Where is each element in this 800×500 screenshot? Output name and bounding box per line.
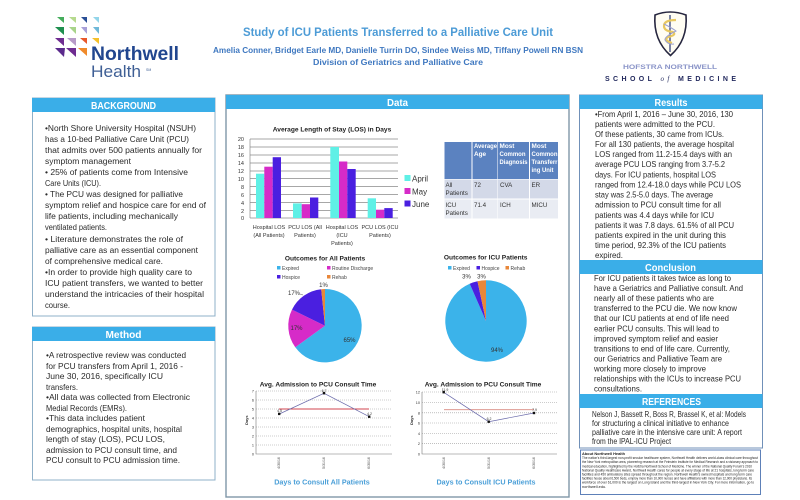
- panel: background: [32, 98, 215, 316]
- text: background: • 25% of patients come from Intensive: [45, 167, 188, 177]
- line chart: all patients consult time: 1: [252, 444, 254, 448]
- text: conclusion: nearly all of these patients who are: [594, 293, 714, 303]
- text: background: symptom relief and hospice care for end of: [45, 200, 207, 210]
- text: results: patients expired in the unit during this: [595, 230, 727, 240]
- text: results: •From April 1, 2016 – June 30, 2016, 130: [595, 109, 733, 119]
- table: patient characteristics: ing Unit: [532, 167, 554, 174]
- bar chart: average length of stay: PCU LOS (ICU: [362, 225, 399, 231]
- text: conclusion: consultations.: [594, 384, 642, 394]
- line chart: ICU patients consult time: Days to Consult ICU Patients: [436, 478, 536, 486]
- line chart: all patients consult time: 0: [252, 452, 254, 456]
- bar chart: average length of stay: Hospital LOS: [326, 225, 359, 231]
- text: results: For all 130 patients, the average hospital: [595, 139, 734, 149]
- logo: Hofstra Northwell School of Medicine: [605, 12, 736, 83]
- table: patient characteristics: ER: [532, 182, 541, 189]
- heading: background: BACKGROUND: [91, 100, 156, 112]
- bar chart: average length of stay: PCU LOS (All: [288, 225, 322, 231]
- text box: about Northwell Health: National Quality Healthcare Award, Northwell Health cares for people at every stage of life at 21 hospitals, long term care: [582, 467, 754, 472]
- text box: about Northwell Health: workforce of over 61,000 is the largest on Long Island and the third-largest in New York City. For more information, go to: [582, 480, 754, 485]
- line chart: ICU patients consult time: 6.2: [487, 417, 491, 421]
- text: method: for PCU transfers from April 1, 2016 -: [46, 361, 183, 371]
- text: background: understand the intricacies of their hospital: [45, 289, 204, 299]
- panel: method: [32, 327, 215, 480]
- text: conclusion: earlier PCU consults. This will lead to: [594, 324, 719, 334]
- legend: months: June: [412, 200, 430, 209]
- bar chart: average length of stay: 0: [241, 216, 244, 222]
- line chart: all patients consult time: 5: [252, 408, 254, 412]
- text: references: palliative care in the intensive care unit: A report: [592, 427, 742, 437]
- table: patient characteristics: Age: [474, 151, 487, 158]
- text: method: Medial Records (EMRs).: [46, 403, 127, 413]
- line chart: ICU patients consult time: 0: [418, 452, 420, 456]
- pie chart: outcomes for ICU patients: Outcomes for ICU Patients: [444, 254, 528, 262]
- text: results: expired.: [595, 250, 623, 260]
- line chart: ICU patients consult time: Days: [409, 415, 414, 425]
- line chart: ICU patients consult time: 4: [418, 432, 420, 436]
- heading: method: [32, 327, 215, 341]
- text: background: •North Shore University Hospital (NSUH): [45, 123, 196, 133]
- logo: Northwell Health: Northwell: [91, 44, 179, 65]
- text: conclusion: For ICU patients it takes twice as long to: [594, 273, 731, 283]
- text: method: •A retrospective review was conducted: [46, 350, 186, 360]
- line chart: ICU patients consult time: 8: [418, 411, 420, 415]
- pie chart: outcomes for ICU patients: Rehab: [510, 266, 525, 272]
- text: background: • Literature demonstrates the role of: [45, 234, 184, 244]
- line chart: ICU patients consult time: 7.9: [532, 408, 537, 412]
- pie chart: outcomes for ICU patients: 3%: [477, 274, 487, 280]
- table: patient characteristics: Common: [532, 151, 558, 158]
- text: background: palliative care as an essential component: [45, 245, 199, 255]
- line chart: all patients consult time: 4: [252, 416, 254, 420]
- text: conclusion: improved symptom relief and easier: [594, 334, 718, 344]
- pie chart: outcomes for ICU patients: [444, 254, 528, 362]
- heading: results: [580, 95, 762, 109]
- bar chart: average length of stay: 12: [238, 169, 244, 175]
- table: patient characteristics: Common: [500, 151, 526, 158]
- text: references: for structuring a clinical initiative to enhance: [592, 418, 729, 428]
- table: patient characteristics: 71.4: [474, 202, 487, 209]
- heading: references: REFERENCES: [642, 396, 701, 408]
- text: references: from the IPAL-ICU Project: [592, 436, 671, 446]
- line chart: all patients consult time: 4.5: [277, 409, 282, 413]
- text: method: •This data includes patient: [46, 413, 146, 423]
- bar chart: average length of stay: 18: [238, 145, 244, 151]
- bar chart: average length of stay: (All Patients): [253, 233, 285, 239]
- text: method: PCU consult to PCU admission time.: [46, 455, 180, 465]
- text box: about Northwell Health: About Northwell Health: [582, 451, 626, 456]
- legend: months: [404, 174, 430, 209]
- line chart: all patients consult time: Avg. Admission to PCU Consult Time: [260, 382, 377, 388]
- line chart: ICU patients consult time: 5/31/16: [487, 457, 491, 469]
- table: patient characteristics: Patients: [446, 210, 468, 217]
- table: patient characteristics: Most: [532, 143, 547, 150]
- text: method: admission to PCU consult time, and: [46, 445, 177, 455]
- text: conclusion: that our ICU patients at end of life need: [594, 313, 729, 323]
- line chart: ICU patients consult time: 11.9: [442, 388, 448, 392]
- text: background: •In order to provide high quality care to: [45, 267, 192, 277]
- table: patient characteristics: MICU: [532, 202, 547, 209]
- pie chart: outcomes for ICU patients: 94%: [491, 348, 504, 354]
- line chart: all patients consult time: Days: [244, 415, 249, 425]
- text box: about Northwell Health: northwell.edu.: [582, 484, 606, 489]
- heading: data: Data: [387, 97, 408, 109]
- line chart: ICU patients consult time: [409, 382, 557, 486]
- pie chart: outcomes for all patients: [277, 256, 373, 362]
- text box: about Northwell Health: medical education, highlighted by the Hofstra Northwell School of Medicine. The winner of the National Quality Forum's 2010: [582, 463, 753, 468]
- text: background: symptom management: [45, 156, 132, 166]
- line chart: all patients consult time: 2: [252, 434, 254, 438]
- text: conclusion: working more closely to improve: [593, 364, 706, 374]
- bar chart: average length of stay: Patients): [369, 233, 391, 239]
- bar chart: average length of stay: 4: [241, 201, 244, 207]
- text: conclusion: our Geriatrics and Palliative Team are: [594, 354, 722, 364]
- heading: data: [226, 95, 569, 109]
- text box: about Northwell Health: facilities house about 6,500 beds, employ more than 10,000 nurses and have affiliations with more than 12,000 physicians. Its: [582, 476, 752, 481]
- logo: Hofstra Northwell School of Medicine: SCHOOL of MEDICINE: [605, 75, 736, 83]
- authors and division: Division of Geriatrics and Palliative Care: [313, 57, 483, 67]
- line chart: ICU patients consult time: 12: [416, 390, 420, 394]
- text: background: that admits over 500 patients annually for: [45, 145, 202, 155]
- bar chart: average length of stay: 20: [238, 137, 244, 143]
- table: patient characteristics: [444, 142, 558, 218]
- line chart: all patients consult time: 4/30/16: [277, 457, 281, 469]
- line chart: all patients consult time: 3: [252, 426, 254, 430]
- line chart: all patients consult time: Days to Consult All Patients: [274, 478, 370, 486]
- line chart: all patients consult time: 6/30/16: [367, 457, 371, 469]
- line chart: ICU patients consult time: 6/30/16: [532, 457, 536, 469]
- text: results: stay was 2.5-5.0 days. The average: [595, 190, 713, 200]
- pie chart: outcomes for ICU patients: Hospice: [482, 266, 500, 272]
- text box: about Northwell Health: the New York metropolitan area, pioneering research at the Feinstein Institute for Medical Research and a visionary approach to: [582, 459, 758, 464]
- text: background: ICU patient transfers, we wanted to better: [45, 278, 203, 288]
- line chart: ICU patients consult time: 4/30/16: [442, 457, 446, 469]
- text box: about Northwell Health: facilities and 450 ambulatory sites spread throughout the region. Northwell Health's owned hospitals and long term care: [582, 472, 752, 476]
- table: patient characteristics: CVA: [500, 182, 513, 189]
- text: background: of comprehensive medical care.: [45, 256, 163, 266]
- bar chart: average length of stay: 2: [241, 209, 244, 215]
- title: Study of ICU Patients Transferred to a Palliative Care Unit: [243, 25, 553, 39]
- heading: conclusion: Conclusion: [645, 262, 696, 274]
- pie chart: outcomes for all patients: Routine Discharge: [332, 266, 373, 272]
- pie chart: outcomes for all patients: 65%: [343, 338, 356, 344]
- table: patient characteristics: Most: [500, 143, 515, 150]
- table: patient characteristics: Average: [474, 143, 497, 150]
- text: background: [45, 123, 207, 310]
- text: results: [595, 109, 741, 260]
- pie chart: outcomes for ICU patients: Expired: [453, 266, 470, 272]
- bar chart: average length of stay: 6: [241, 193, 244, 199]
- bar chart: average length of stay: [238, 126, 430, 247]
- logo: Northwell Health: [55, 17, 179, 81]
- text: results: average PCU LOS ranging from 3.7-5.2: [595, 159, 725, 169]
- text box: about Northwell Health: [580, 450, 760, 494]
- heading: method: Method: [106, 329, 142, 341]
- pie chart: outcomes for all patients: Rehab: [332, 275, 347, 281]
- panel: data: [226, 95, 569, 497]
- text: background: life patients, including mechanically: [45, 211, 179, 221]
- text: conclusion: [593, 273, 743, 394]
- text: background: Care Units (ICU).: [45, 178, 101, 188]
- table: patient characteristics: 72: [474, 182, 481, 189]
- bar chart: average length of stay: (ICU: [336, 233, 348, 239]
- line chart: all patients consult time: [244, 382, 392, 486]
- text: references: Nelson J, Bassett R, Boss R, Brassel K, et al: Models: [592, 409, 746, 419]
- heading: conclusion: [580, 260, 762, 274]
- bar chart: average length of stay: 8: [241, 185, 244, 191]
- authors and division: Amelia Conner, Bridget Earle MD, Danielle Turrin DO, Sindee Weiss MD, Tiffany Powell RN BSN: [213, 45, 583, 55]
- text: method: June 30, 2016, specifically ICU: [46, 371, 163, 381]
- pie chart: outcomes for all patients: Expired: [282, 266, 299, 272]
- line chart: ICU patients consult time: 6: [418, 422, 420, 426]
- pie chart: outcomes for all patients: Hospice: [282, 275, 300, 281]
- table: patient characteristics: ICU: [446, 202, 456, 209]
- bar chart: average length of stay: Patients): [331, 241, 353, 247]
- text: results: ranged from 12.4-18.0 days while PCU LOS: [595, 180, 741, 190]
- text: results: Of these patients, 30 came from ICUs.: [595, 129, 724, 139]
- line chart: all patients consult time: 6: [252, 398, 254, 402]
- authors and division: [213, 45, 583, 67]
- logo: Northwell Health: Health: [91, 62, 141, 81]
- text: method: [46, 350, 191, 465]
- text: conclusion: relationships with the ICUs to increase PCU: [594, 374, 741, 384]
- bar chart: average length of stay: 16: [238, 153, 244, 159]
- text: results: patients were admitted to the PCU.: [595, 119, 715, 129]
- text box: about Northwell Health: The nation's third-largest non-profit secular healthcare system, Northwell Health delivers world-class clinical care throughout: [582, 455, 759, 460]
- panel: results, conclusion and references: [580, 95, 762, 448]
- text: conclusion: have a Geriatrics and Palliative consult. And: [594, 283, 743, 293]
- text: conclusion: transferred to the PCU die. We now know: [594, 303, 738, 313]
- text: background: course.: [45, 300, 70, 310]
- text: references: [592, 409, 746, 446]
- pie chart: outcomes for all patients: Outcomes for All Patients: [285, 256, 366, 262]
- logo: Hofstra Northwell School of Medicine: HOFSTRA NORTHWELL: [623, 65, 717, 71]
- text: background: • The PCU was designed for palliative: [45, 189, 183, 199]
- text: results: admission to PCU consult time for all: [595, 200, 721, 210]
- heading: background: [32, 98, 215, 112]
- table: patient characteristics: ICH: [500, 202, 511, 209]
- text: conclusion: transitions to end of life care. Currently,: [594, 344, 730, 354]
- bar chart: average length of stay: Patients): [294, 233, 316, 239]
- text: method: transfers.: [46, 382, 78, 392]
- legend: months: April: [412, 174, 428, 184]
- text: results: days. For ICU patients, hospital LOS: [595, 170, 716, 180]
- line chart: all patients consult time: 4.2: [367, 412, 372, 416]
- legend: months: May: [412, 188, 427, 196]
- heading: references: [580, 394, 762, 408]
- text: results: time period, 92.3% of the ICU patients: [595, 240, 727, 250]
- bar chart: average length of stay: 14: [238, 161, 244, 167]
- bar chart: average length of stay: Average Length of Stay (LOS) in Days: [273, 126, 392, 134]
- pie chart: outcomes for ICU patients: 3%: [462, 274, 472, 280]
- line chart: ICU patients consult time: 10: [416, 401, 420, 405]
- line chart: all patients consult time: 5/31/16: [322, 457, 326, 469]
- text: background: ventilated patients.: [45, 222, 107, 232]
- text: method: demographics, hospital units, hospital: [46, 424, 182, 434]
- pie chart: outcomes for all patients: 17%: [290, 326, 303, 332]
- line chart: ICU patients consult time: 2: [418, 442, 420, 446]
- pie chart: outcomes for all patients: 17%: [288, 291, 301, 297]
- text: method: •All data was collected from Electronic: [46, 392, 191, 402]
- text: results: LOS ranged from 11.2-15.4 days with an: [595, 149, 732, 159]
- text: background: has a 10-bed Palliative Care Unit (PCU): [45, 134, 189, 144]
- table: patient characteristics: Patients: [446, 190, 468, 197]
- line chart: ICU patients consult time: Avg. Admission to PCU Consult Time: [425, 382, 542, 388]
- logo: Northwell Health: SM: [146, 68, 151, 72]
- table: patient characteristics: Diagnosis: [500, 159, 528, 166]
- bar chart: average length of stay: 10: [238, 177, 244, 183]
- text: results: patients was 4.4 days while for ICU: [595, 210, 714, 220]
- line chart: all patients consult time: 6.7: [322, 389, 326, 393]
- heading: results: Results: [654, 97, 688, 109]
- table: patient characteristics: Transferr: [532, 159, 558, 166]
- text: results: patients it was 7.8 days. 61.5% of all PCU: [595, 220, 734, 230]
- pie chart: outcomes for all patients: 1%: [319, 283, 329, 289]
- line chart: all patients consult time: 7: [252, 390, 254, 394]
- bar chart: average length of stay: Hospital LOS: [253, 225, 286, 231]
- text: method: length of stay (LOS), PCU LOS,: [46, 434, 165, 444]
- table: patient characteristics: All: [446, 182, 452, 189]
